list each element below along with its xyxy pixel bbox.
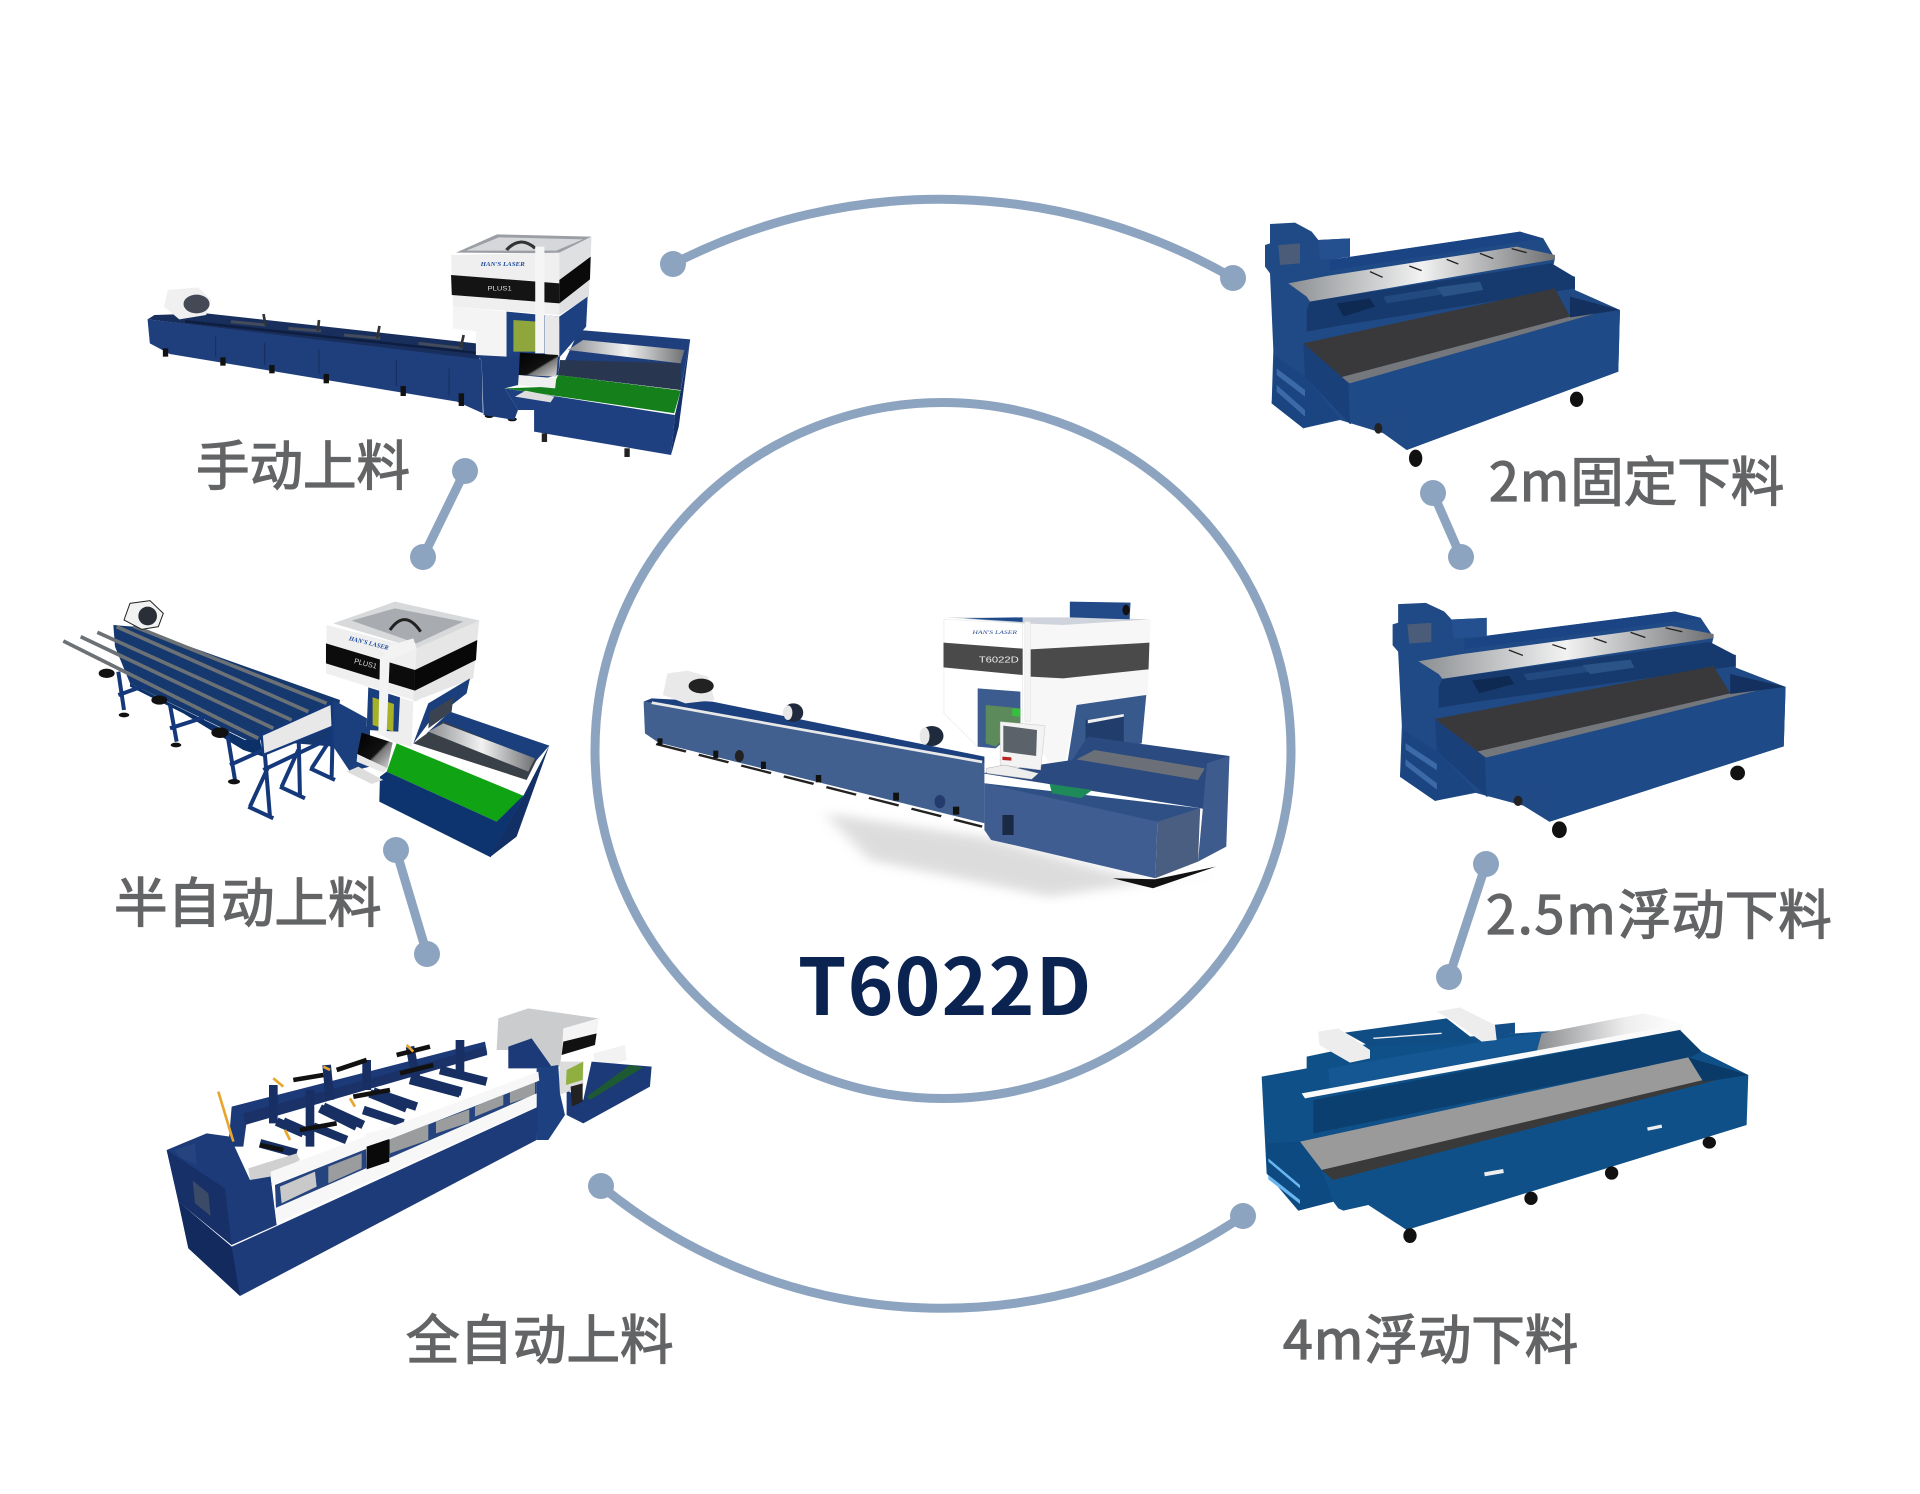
machine: 2m fixed unloading bbox=[1265, 223, 1620, 467]
machine: full-auto loading bbox=[167, 1008, 652, 1296]
label: full-auto loading: 全自动上料 bbox=[406, 1298, 674, 1375]
connector: 2.5m to 4m bbox=[1436, 851, 1499, 990]
arc connector: top bbox=[660, 199, 1246, 291]
connector: semi-auto to full-auto bbox=[383, 837, 440, 967]
machine: 4m floating unloading bbox=[1262, 1007, 1748, 1243]
connector: manual to semi-auto bbox=[410, 458, 478, 570]
label: semi-auto loading: 半自动上料 bbox=[114, 861, 382, 938]
machine: manual loading bbox=[148, 234, 690, 457]
machine: T6022D center bbox=[644, 602, 1229, 897]
cabinet text: HAN'S LASER bbox=[971, 630, 1017, 636]
cabinet text: HAN'S LASER bbox=[347, 635, 389, 652]
label: 2.5m floating unloading: 2.5m浮动下料 bbox=[1486, 873, 1832, 950]
connector: 2m to 2.5m bbox=[1420, 480, 1474, 570]
title: T6022D: T6022D bbox=[798, 926, 1092, 1038]
model plate text: PLUS1 bbox=[488, 285, 512, 293]
central ring bbox=[595, 402, 1291, 1098]
arc connector: bottom bbox=[588, 1173, 1256, 1308]
machine: semi-auto loading bbox=[63, 601, 549, 857]
label: 2m fixed unloading: 2m固定下料 bbox=[1489, 440, 1784, 517]
label: manual loading: 手动上料 bbox=[196, 424, 410, 501]
label: 4m floating unloading: 4m浮动下料 bbox=[1283, 1298, 1578, 1375]
machine: 2.5m floating unloading bbox=[1393, 603, 1786, 838]
cabinet text: HAN'S LASER bbox=[480, 261, 525, 268]
model plate text: PLUS1 bbox=[353, 656, 378, 671]
model plate text: T6022D bbox=[979, 656, 1019, 665]
